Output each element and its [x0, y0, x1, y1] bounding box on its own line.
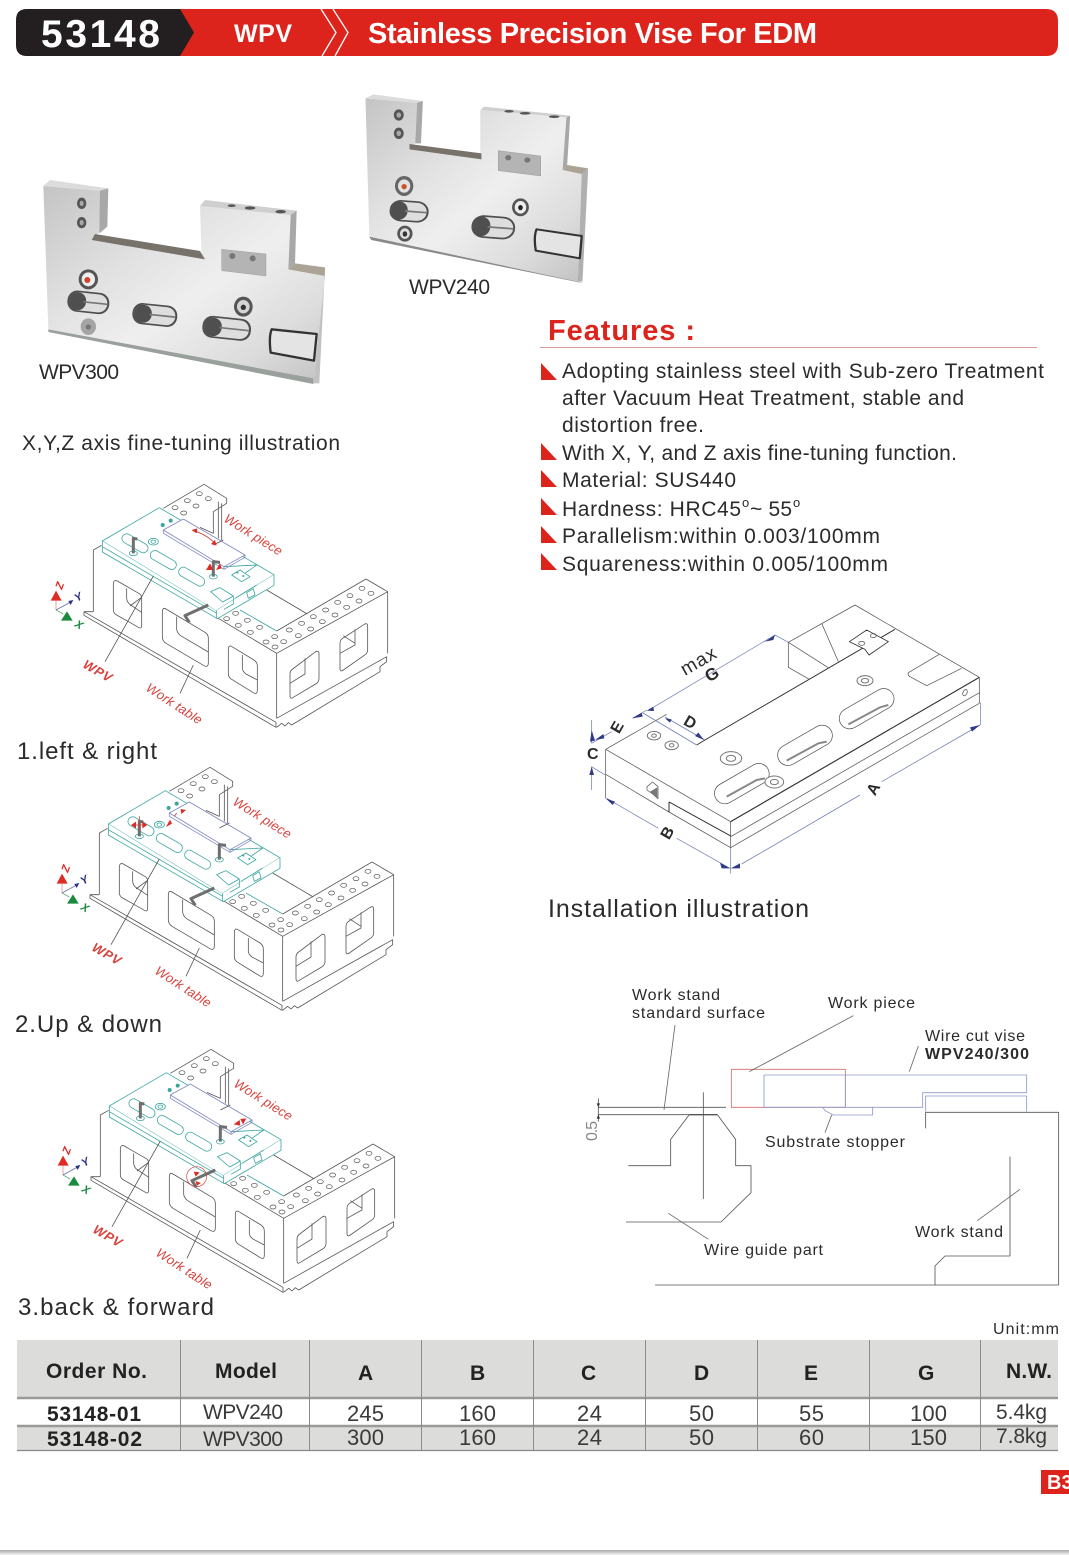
- features panel: Squareness:within 0.005/100mm: [562, 553, 888, 576]
- label: work piece: Work piece: [828, 995, 915, 1012]
- axis letters: Z: [60, 1144, 75, 1157]
- features panel: [540, 315, 1044, 576]
- features panel: o: [793, 495, 800, 510]
- dimension labels: [587, 663, 884, 842]
- product photo: WPV240 vise: [365, 94, 588, 283]
- page bottom rule: [0, 1550, 1069, 1555]
- axis letters: Y: [80, 1155, 93, 1170]
- dimension drawing of vise: [587, 605, 981, 873]
- axis letters: Z: [53, 579, 68, 592]
- header banner: [16, 9, 1058, 56]
- table: row 53148-01: 245: [347, 1401, 384, 1426]
- table: row 53148-01: 53148-01: [47, 1403, 141, 1426]
- dimension labels: E: [608, 718, 628, 736]
- table: row 53148-02: 53148-02: [47, 1428, 142, 1451]
- table: row 53148-02: 24: [577, 1425, 602, 1450]
- dimension label: max: max: [677, 643, 721, 680]
- dimension labels: B: [658, 824, 678, 842]
- label: WPV: WPV: [80, 657, 116, 686]
- axis letters: [53, 579, 86, 633]
- isometric diagram 2: up and down: [57, 767, 394, 1010]
- features panel: Parallelism:within 0.003/100mm: [562, 525, 880, 548]
- header: product title: Stainless Precision Vise For EDM: [368, 18, 817, 50]
- installation section diagram: [584, 987, 1059, 1285]
- features panel: after Vacuum Heat Treatment, stable and: [562, 387, 964, 410]
- table: header row: D: [694, 1362, 709, 1385]
- table: row 53148-02: 150: [910, 1425, 947, 1450]
- label: work table: Work table: [153, 1245, 215, 1292]
- header: chevron separator: [321, 9, 348, 56]
- table: row 53148-01: 24: [577, 1401, 602, 1426]
- axis letters: X: [72, 618, 85, 633]
- label: work piece: Work piece: [221, 511, 285, 559]
- label: work stand standard surface: Work stand: [632, 987, 720, 1004]
- dimension labels: G: [702, 663, 722, 686]
- label: WPV300: WPV300: [39, 361, 119, 384]
- header: order number tab: [16, 9, 194, 56]
- table: header row: E: [804, 1362, 818, 1385]
- features panel: Material: SUS440: [562, 469, 736, 492]
- label: work stand standard surface: standard surface: [632, 1005, 765, 1022]
- table: row 53148-02: 160: [459, 1425, 496, 1450]
- label: wire cut vise: [925, 1028, 1029, 1063]
- table: row 53148-01: 5.4kg: [996, 1401, 1047, 1424]
- table: row 53148-02: 50: [689, 1425, 714, 1450]
- axis letters: X: [78, 901, 91, 916]
- label: WPV: WPV: [90, 1222, 126, 1251]
- features panel: distortion free.: [562, 414, 704, 437]
- axis letters: X: [79, 1183, 92, 1198]
- axis letters: [60, 1144, 93, 1198]
- caption: left and right: 1.left & right: [17, 738, 157, 765]
- label: work piece: Work piece: [230, 794, 294, 842]
- header: order number: 53148: [41, 13, 160, 56]
- table: header row: C: [581, 1362, 596, 1385]
- axis letters: Z: [59, 862, 74, 875]
- table: row 53148-01: 55: [799, 1401, 824, 1426]
- table: header row: N.W.: [1006, 1360, 1052, 1383]
- features panel: o: [742, 495, 749, 510]
- features heading: Features :: [548, 315, 695, 347]
- label: work table: Work table: [143, 680, 205, 727]
- axis letters: Y: [78, 873, 92, 888]
- label: work stand: Work stand: [915, 1224, 1003, 1241]
- features panel: ~ 55: [750, 498, 792, 521]
- label: wire cut vise: Wire cut vise: [925, 1028, 1025, 1045]
- table: row 53148-01: WPV240: [203, 1401, 283, 1424]
- unit note: Unit:mm: [993, 1321, 1059, 1338]
- label: WPV: WPV: [90, 940, 125, 969]
- caption: up and down: 2.Up & down: [15, 1011, 162, 1038]
- table: header row: Model: [215, 1360, 277, 1383]
- table: header row: Order No.: [46, 1360, 147, 1383]
- features panel: With X, Y, and Z axis fine-tuning function.: [562, 442, 957, 465]
- table: row 53148-01: 100: [910, 1401, 947, 1426]
- dimension labels: D: [680, 713, 699, 733]
- label: work stand standard surface: [632, 987, 765, 1022]
- table: header row: B: [470, 1362, 485, 1385]
- table: row 53148-02: 60: [799, 1425, 824, 1450]
- isometric diagram 3: back and forward: [58, 1049, 395, 1292]
- label: work table: Work table: [152, 963, 214, 1010]
- features panel: Hardness: HRC45: [562, 498, 741, 521]
- table: row 53148-01: 50: [689, 1401, 714, 1426]
- feature list text: Adopting stainless steel with Sub-zero Treatment: [562, 360, 1044, 383]
- table: row 53148-01: 160: [459, 1401, 496, 1426]
- dimension labels: C: [587, 746, 599, 763]
- dimension labels: A: [864, 780, 884, 798]
- table: row 53148-02: [47, 1425, 1047, 1451]
- table: header row: A: [358, 1362, 373, 1385]
- heading: fine-tuning illustration: X,Y,Z axis fine-tuning illustration: [22, 432, 340, 455]
- label: work piece: Work piece: [231, 1076, 295, 1124]
- heading: installation illustration: Installation illustration: [548, 895, 809, 923]
- table: row 53148-02: WPV300: [203, 1428, 283, 1451]
- feature bullets: [541, 363, 557, 570]
- label: wire guide part: Wire guide part: [704, 1242, 824, 1259]
- label: WPV240: WPV240: [409, 276, 490, 299]
- isometric diagram 1: left and right: [51, 484, 388, 727]
- label: wire cut vise: WPV240/300: [925, 1046, 1029, 1063]
- table: row 53148-01: [47, 1401, 1047, 1426]
- caption: back and forward: 3.back & forward: [18, 1294, 214, 1321]
- axis letters: Y: [72, 590, 86, 605]
- axis letters: [59, 862, 92, 916]
- table: row 53148-02: 7.8kg: [996, 1425, 1047, 1448]
- label: substrate stopper: Substrate stopper: [765, 1134, 906, 1151]
- table: row 53148-02: 300: [347, 1425, 384, 1450]
- header: series code: WPV: [234, 20, 292, 48]
- dimension: 0.5: 0.5: [584, 1121, 601, 1141]
- table: header and row backgrounds: [17, 1340, 1058, 1450]
- table: header row: [46, 1360, 1052, 1385]
- table: header row: G: [918, 1362, 934, 1385]
- product photo: WPV300 vise: [43, 180, 325, 384]
- specification table: [17, 1340, 1058, 1451]
